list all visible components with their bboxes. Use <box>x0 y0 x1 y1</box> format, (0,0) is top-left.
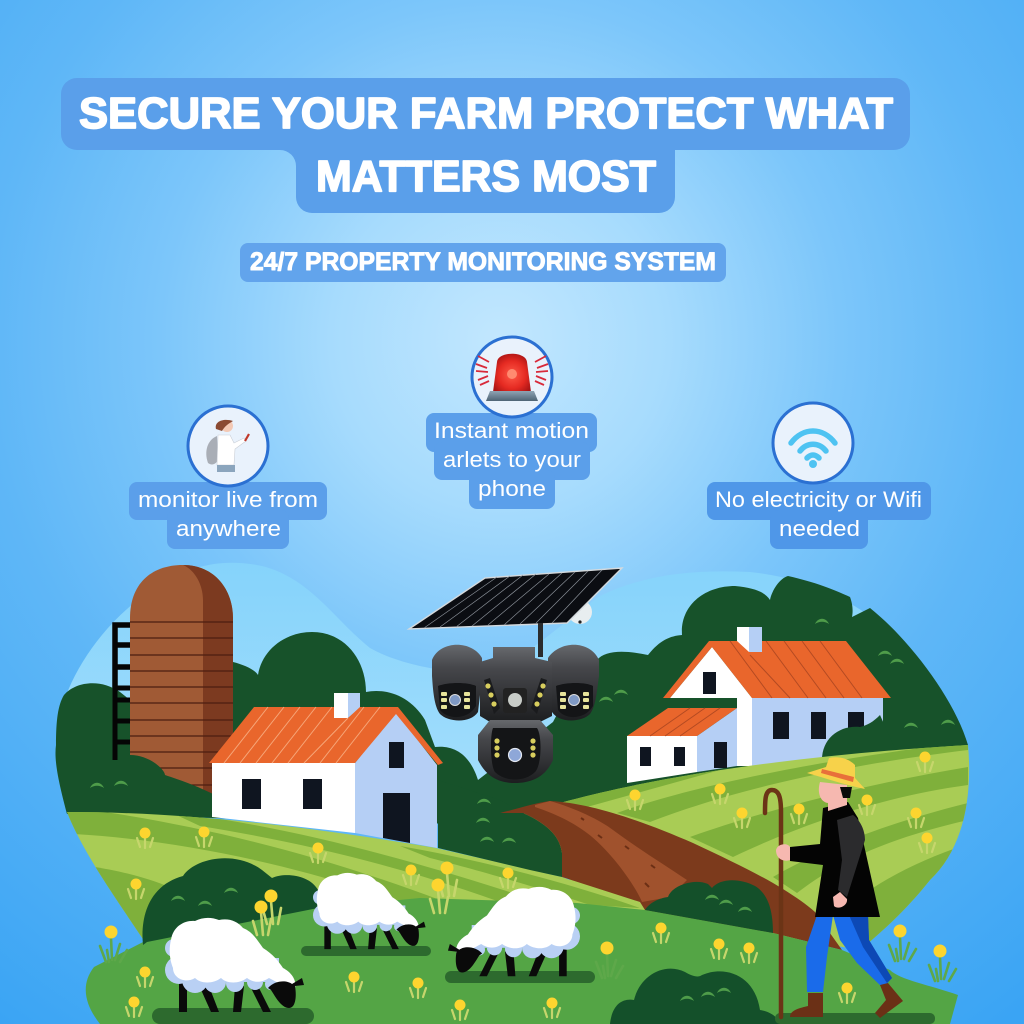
label: instant motion alerts to your phone: Instant motion <box>434 418 589 443</box>
head <box>819 782 847 811</box>
label: instant motion alerts to your phone: arlets to your <box>443 447 581 472</box>
right bush <box>645 880 773 933</box>
right camera head <box>548 645 599 720</box>
ladder rungs on trees <box>115 688 130 760</box>
leg 2 <box>833 915 892 988</box>
farmer <box>765 757 903 1018</box>
title: MATTERS MOST <box>316 152 656 201</box>
grass <box>86 898 958 1024</box>
feature: motion alerts <box>426 337 597 509</box>
farm illustration <box>55 563 969 1024</box>
silo <box>115 565 233 795</box>
label: instant motion alerts to your phone: phone <box>478 476 546 501</box>
sleeve <box>837 815 865 897</box>
sky blob <box>56 563 968 815</box>
flowers <box>100 752 956 1020</box>
right field <box>500 742 969 955</box>
right house <box>627 627 900 783</box>
leaf marks on mid bush <box>476 799 516 843</box>
hands <box>776 844 847 908</box>
left camera head <box>432 645 482 720</box>
feature: no electricity <box>707 403 931 549</box>
label: no electricity or wifi needed <box>707 482 931 549</box>
sheep 2 <box>313 873 426 949</box>
sheep 3 <box>448 887 580 976</box>
left field <box>60 812 645 945</box>
sheep 1 <box>165 918 304 1012</box>
icon: person with phone <box>188 406 268 486</box>
subtitle <box>240 243 726 282</box>
label: monitor live from anywhere: anywhere <box>176 516 281 541</box>
leaf marks on right bush <box>705 895 752 912</box>
tree leaf marks <box>90 619 955 788</box>
title <box>61 78 910 213</box>
label: instant motion alerts to your phone <box>426 413 597 509</box>
leaf marks on back bush <box>171 888 238 906</box>
sheep shadows <box>152 946 935 1024</box>
bottom camera head <box>478 720 553 783</box>
coat <box>790 802 880 917</box>
icon: red siren <box>472 337 552 417</box>
mid bush <box>438 780 562 877</box>
solar camera <box>409 568 622 783</box>
feature: monitor live <box>129 406 327 549</box>
left house <box>209 693 443 848</box>
subtitle: 24/7 PROPERTY MONITORING SYSTEM <box>250 248 716 276</box>
dirt path <box>500 801 842 950</box>
boots <box>790 983 903 1018</box>
label: monitor live from anywhere: monitor live from <box>138 487 318 512</box>
label: no electricity or wifi needed: No electricity or Wifi <box>715 487 922 512</box>
front leg <box>806 915 833 992</box>
back bush <box>142 858 318 945</box>
solar panel <box>409 568 622 657</box>
title: SECURE YOUR FARM PROTECT WHAT <box>79 89 893 138</box>
bottom bush <box>610 969 780 1024</box>
label: monitor live from anywhere <box>129 482 327 549</box>
label: no electricity or wifi needed: needed <box>779 516 860 541</box>
tree line <box>55 576 968 825</box>
leaf marks on bottom bush <box>680 988 731 1001</box>
camera body <box>480 647 552 722</box>
icon: wifi <box>773 403 853 483</box>
hat <box>807 757 865 789</box>
shepherd staff <box>765 790 781 1017</box>
